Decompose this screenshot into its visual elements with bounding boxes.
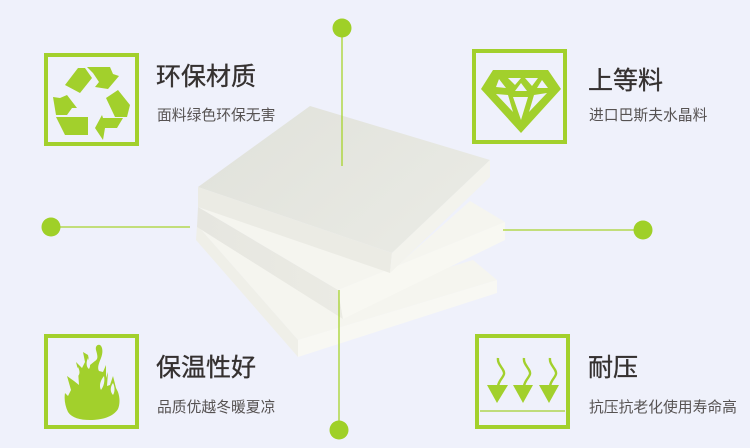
connector: right <box>503 220 652 240</box>
icon: diamond <box>474 51 565 142</box>
middle board <box>197 201 505 319</box>
heading: insulation: 保温性好 <box>156 354 256 382</box>
text: premium material description: 进口巴斯夫水晶料 <box>589 108 707 124</box>
text: insulation description: 品质优越冬暖夏凉 <box>157 400 275 416</box>
connector: left <box>42 218 190 236</box>
icon: flame <box>46 336 137 427</box>
heading: pressure resistance: 耐压 <box>588 354 638 382</box>
text: pressure resistance description: 抗压抗老化使用寿命高 <box>589 400 737 416</box>
foam boards stack <box>196 106 505 357</box>
top board <box>198 106 490 273</box>
bottom board <box>196 225 497 357</box>
icon: recycling <box>46 55 137 144</box>
heading: premium material: 上等料 <box>588 67 663 95</box>
heading: eco material: 环保材质 <box>156 63 256 91</box>
icon: pressure arrows <box>477 336 568 427</box>
text: eco material description: 面料绿色环保无害 <box>157 108 275 124</box>
connector: top <box>332 18 352 166</box>
connector: bottom <box>330 290 348 440</box>
